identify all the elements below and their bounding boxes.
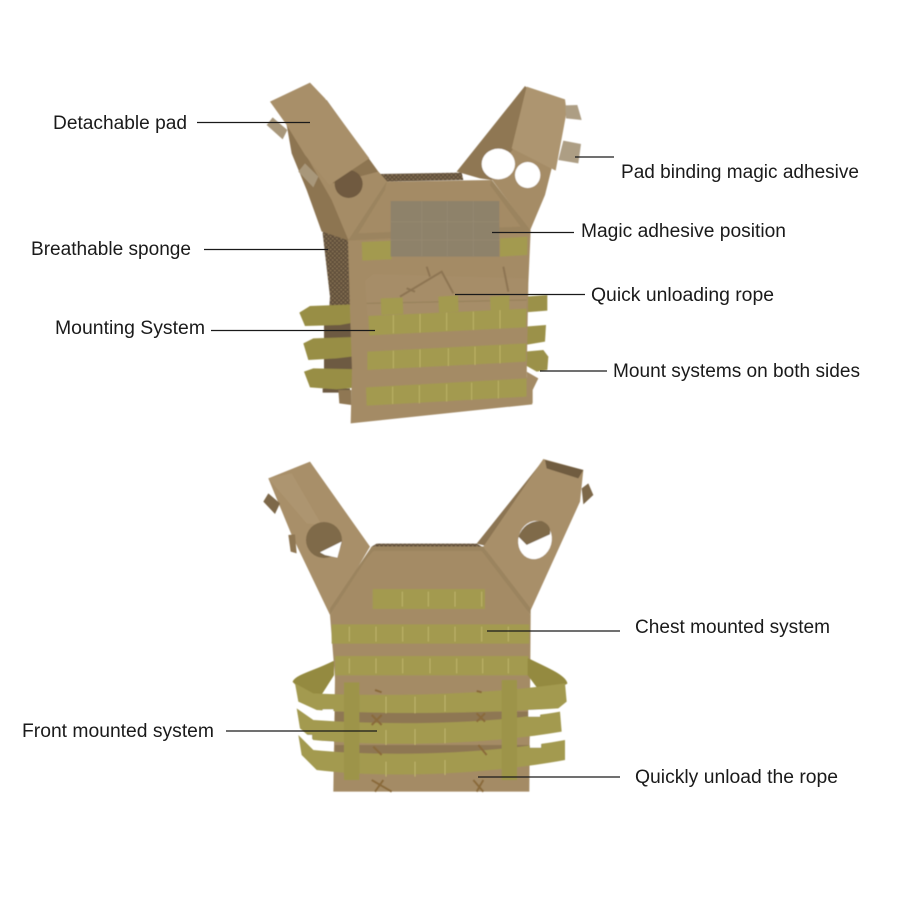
left clip (263, 493, 280, 514)
mesh sponge (323, 212, 355, 370)
back mesh (372, 544, 485, 548)
white slots (307, 709, 541, 748)
vertical strap right (502, 680, 517, 780)
pocket tabs (381, 295, 509, 315)
label: mount systems on both sides: Mount systems on both sides (613, 361, 860, 382)
body panel (330, 547, 531, 792)
waist stitching (386, 695, 445, 777)
label: mounting system: Mounting System (55, 318, 205, 339)
left arm hole (335, 170, 363, 198)
gaps between waist straps (335, 712, 528, 757)
right pad tabs (565, 105, 582, 120)
vertical strap left (344, 682, 359, 780)
label: detachable pad: Detachable pad (53, 113, 187, 134)
right pad (512, 87, 567, 171)
lower left strap shadow (323, 322, 353, 393)
left shoulder strap (287, 100, 387, 241)
chest stitching (349, 592, 508, 673)
molle rows (368, 309, 527, 335)
waist strap 2 (297, 708, 562, 744)
magic adhesive panel (391, 201, 499, 257)
main body panel (348, 180, 532, 423)
left side tab (288, 534, 297, 553)
label: pad binding magic adhesive: Pad binding magic adhesive (621, 162, 859, 183)
pocket flap (365, 274, 527, 317)
rope (400, 267, 508, 297)
right shoulder (483, 459, 583, 612)
molle stitching (393, 310, 500, 404)
left shoulder (268, 462, 370, 615)
leader lines (197, 122, 620, 777)
vest: rear view with straps (263, 459, 593, 792)
lower left pouch tail (338, 390, 351, 405)
label: magic adhesive position: Magic adhesive position (581, 221, 786, 242)
ropes (372, 690, 487, 792)
right lower tab (558, 141, 581, 163)
side straps right (525, 295, 548, 372)
upper olive band (362, 237, 527, 261)
left hole (306, 522, 342, 558)
label: breathable sponge: Breathable sponge (31, 239, 191, 260)
vest: front view with detachable pads (267, 83, 582, 423)
label: quick unloading rope: Quick unloading rope (591, 285, 774, 306)
label: front mounted system: Front mounted system (22, 721, 214, 742)
right rear strap (457, 86, 537, 180)
right clip (582, 483, 593, 504)
right top shadow (545, 460, 583, 478)
chest patch (373, 589, 485, 609)
side loops (293, 659, 567, 693)
right white holes (482, 149, 515, 179)
left side tab (298, 163, 318, 187)
label: quickly unload the rope: Quickly unload the rope (635, 767, 838, 788)
left pad tab (267, 117, 287, 139)
label: chest mounted system: Chest mounted system (635, 617, 830, 638)
right rear strap (477, 460, 552, 552)
chest molle lower (335, 656, 528, 675)
right front strap (492, 148, 552, 231)
waist strap 3 (298, 735, 565, 774)
chest molle upper (332, 624, 529, 644)
waist strap 1 (295, 683, 567, 713)
left pad (270, 83, 369, 185)
right hole (514, 517, 556, 563)
right edge detail (527, 372, 538, 403)
side straps left (299, 304, 365, 389)
